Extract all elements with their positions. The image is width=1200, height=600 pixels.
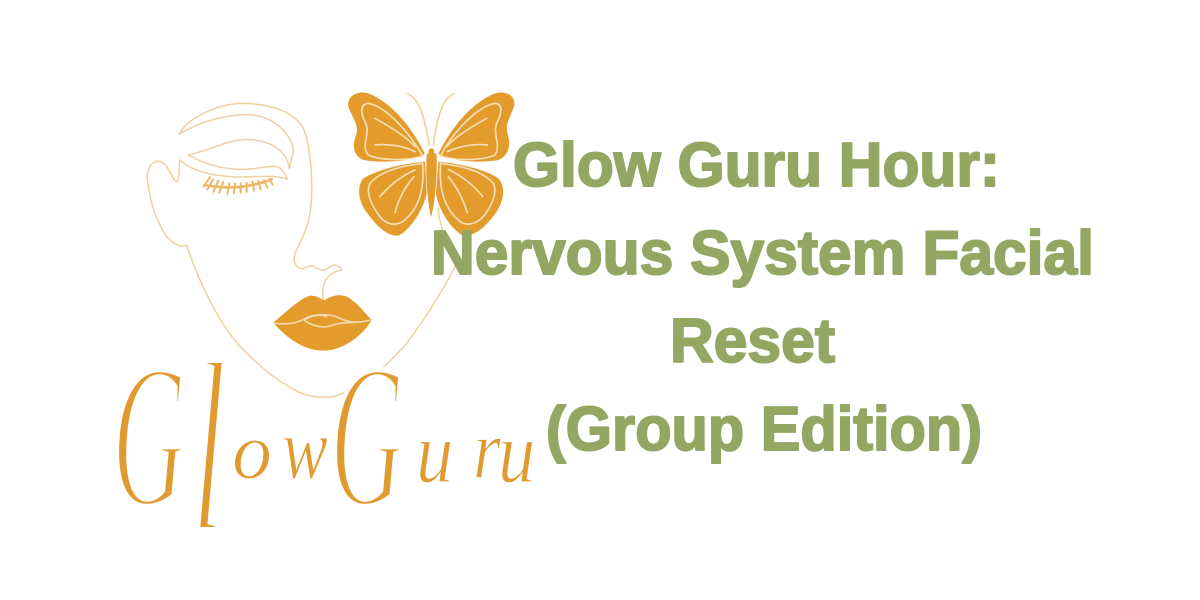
butterfly xyxy=(348,92,514,236)
title xyxy=(431,131,1094,464)
wordmark: GlowGuru: r xyxy=(473,404,501,496)
wordmark: GlowGuru: G xyxy=(112,324,186,551)
wordmark: GlowGuru: G xyxy=(330,324,404,551)
lips xyxy=(273,295,372,351)
title line 3: Reset xyxy=(670,307,835,376)
title line 4: (Group Edition) xyxy=(546,395,982,464)
logo: Glow Guru xyxy=(112,92,535,583)
wordmark: GlowGuru: w xyxy=(282,401,328,498)
wordmark: GlowGuru: u xyxy=(498,403,535,501)
eyelashes xyxy=(203,177,273,194)
face line art xyxy=(147,103,455,397)
wordmark: GlowGuru: u xyxy=(416,403,453,501)
wordmark: GlowGuru xyxy=(112,311,535,583)
title line 2: Nervous System Facial xyxy=(431,219,1094,288)
wordmark: GlowGuru: o xyxy=(232,408,272,496)
wordmark: GlowGuru: l xyxy=(192,311,226,583)
title line 1: Glow Guru Hour: xyxy=(513,131,1000,200)
